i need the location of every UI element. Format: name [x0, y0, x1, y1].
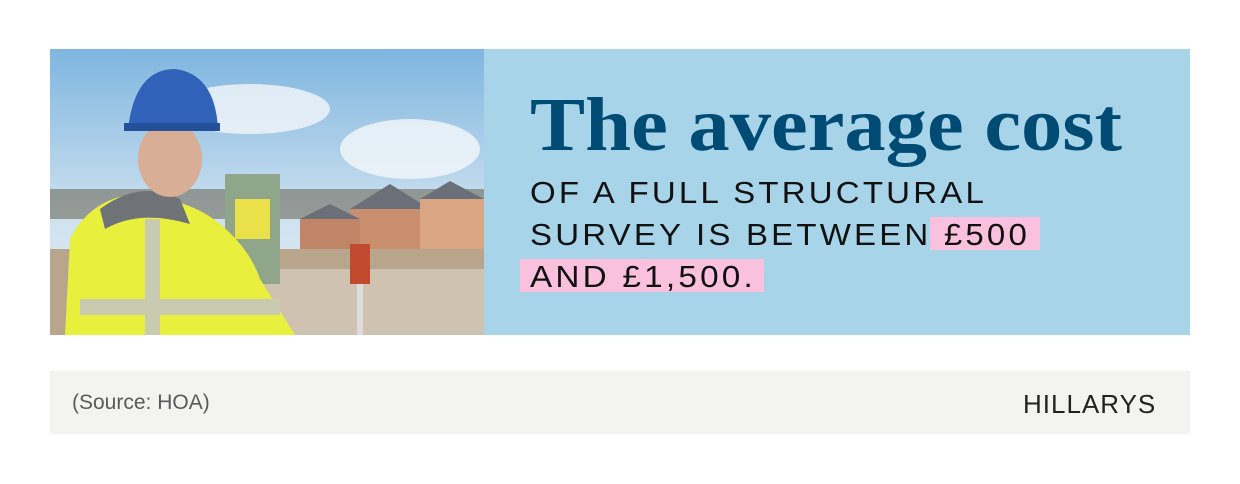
- panel: blue stat: [484, 49, 1190, 335]
- title: The average cost: [530, 83, 1122, 167]
- subtitle text: [530, 175, 1030, 294]
- logo: HILLARYS: HILLARYS: [1023, 389, 1156, 419]
- theodolite: [225, 174, 280, 284]
- subtitle text: OF A FULL STRUCTURAL: [530, 175, 987, 210]
- subtitle text: SURVEY IS BETWEEN £500: [530, 217, 1030, 252]
- photo panel: surveyor: [50, 49, 484, 335]
- source text: (Source: HOA): [72, 391, 210, 414]
- highlight: AND £1,500.: [520, 259, 764, 292]
- footer bar: [50, 371, 1190, 434]
- worker: [65, 194, 295, 335]
- subtitle text: AND £1,500.: [530, 259, 756, 294]
- highlight: £500: [930, 217, 1040, 250]
